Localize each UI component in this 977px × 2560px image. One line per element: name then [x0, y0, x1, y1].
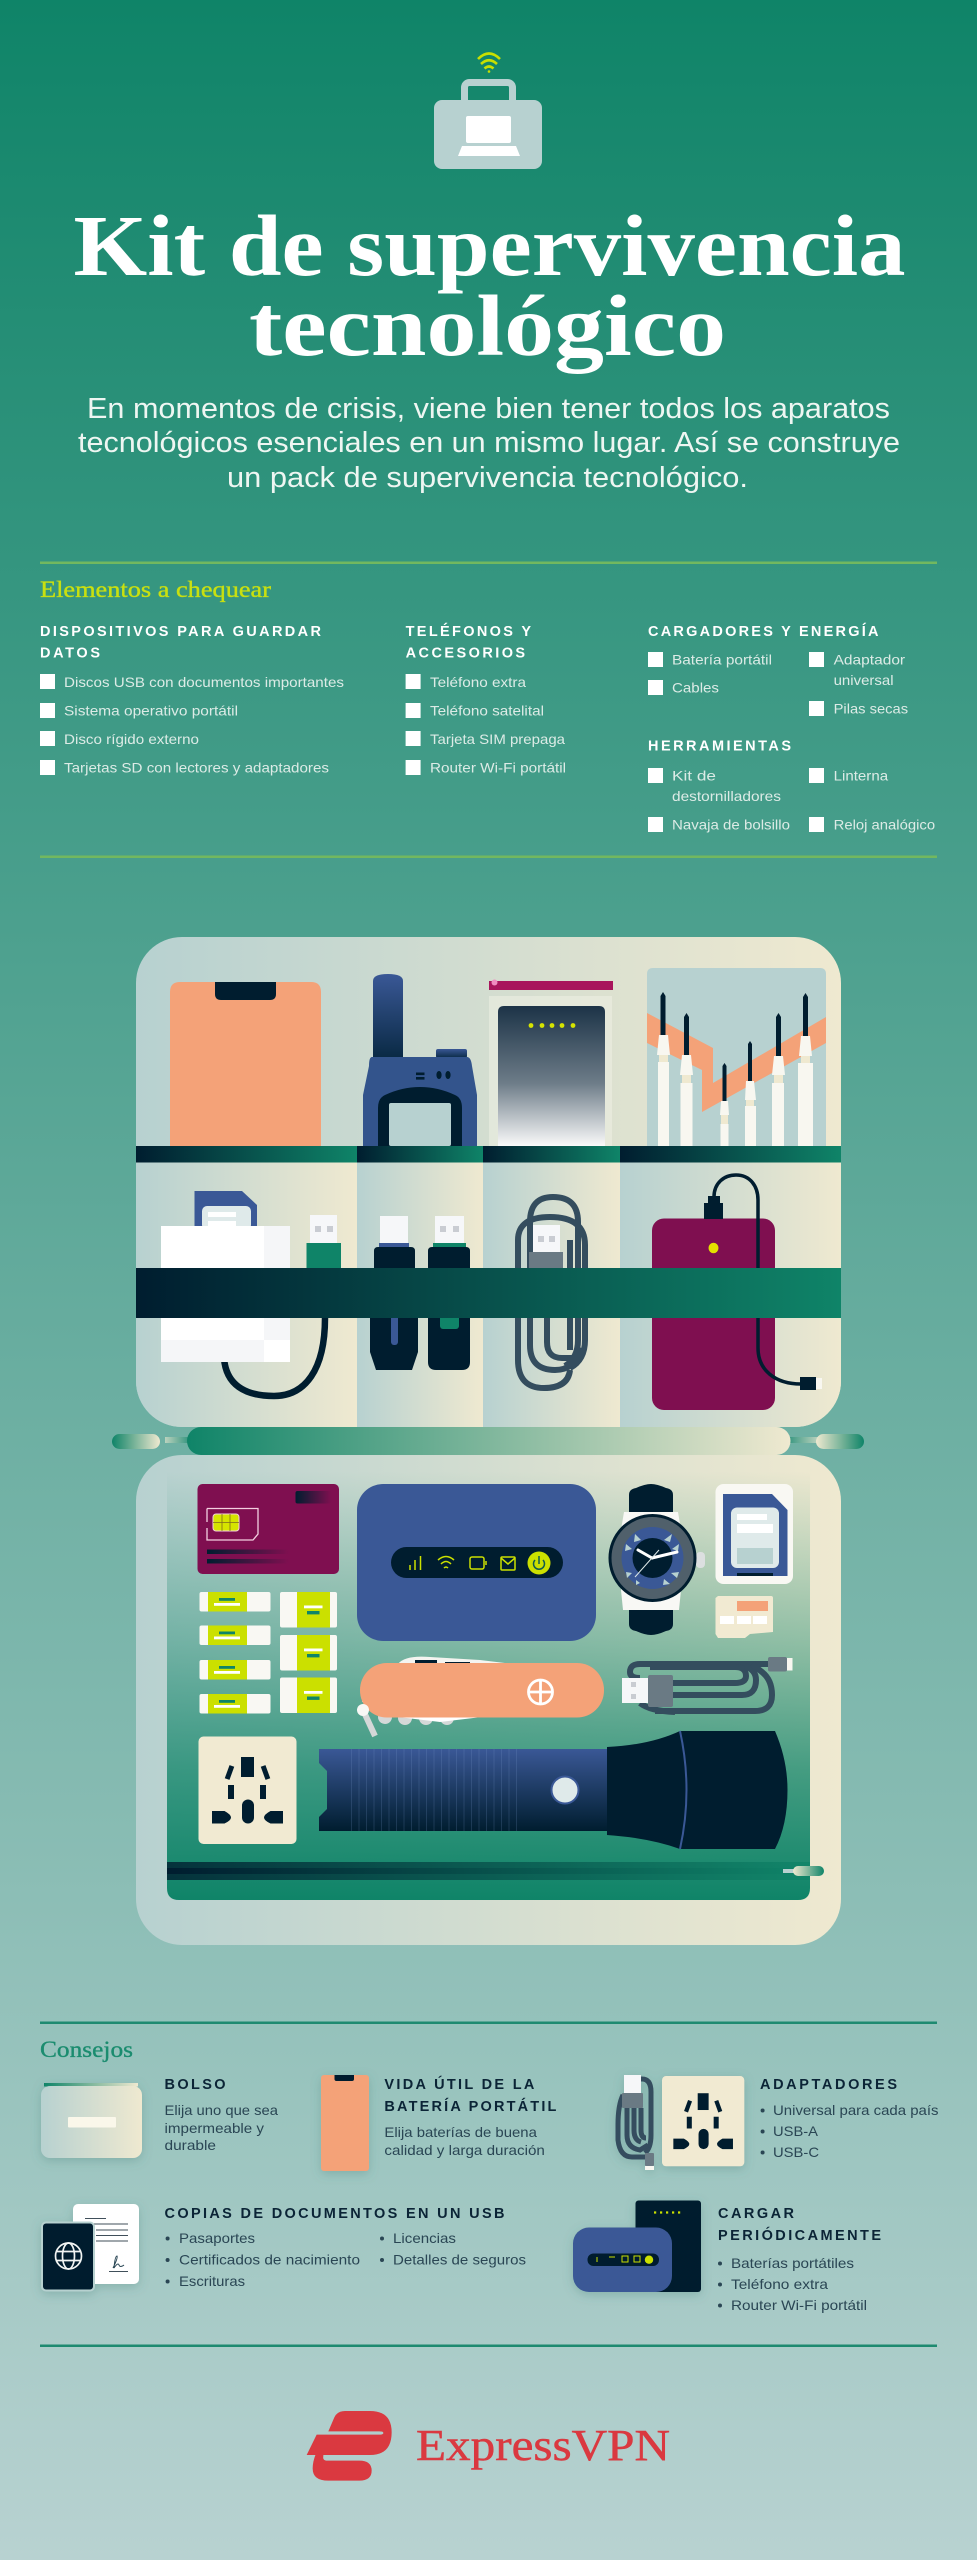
logo: ExpressVPN: ExpressVPN: [416, 2421, 670, 2470]
icon: logo mark: [307, 2411, 392, 2481]
column: herramientas: Navaja de bolsillo: [672, 816, 790, 832]
tip: adaptadores: USB-A: [773, 2123, 819, 2139]
icon: analog watch: [610, 1484, 705, 1635]
column: herramientas: Reloj analógico: [834, 816, 935, 832]
column: herramientas: HERRAMIENTAS: [648, 738, 791, 754]
column: teléfonos: TELÉFONOS Y: [406, 623, 531, 640]
column: dispositivos: Discos USB con documentos importantes: [64, 674, 344, 690]
icon: portable wifi router: [357, 1484, 596, 1641]
icon: extra phone: [170, 982, 321, 1146]
column: cargadores: Cables: [672, 680, 719, 696]
column: teléfonos: Tarjeta SIM prepaga: [430, 731, 565, 747]
panel: open case, bottom half: [136, 1455, 841, 1945]
icon: batteries: [200, 1592, 337, 1714]
tip: bolso: BOLSO: [164, 2077, 226, 2093]
column: herramientas: Kit de: [672, 768, 716, 784]
tip: bolso: [41, 2077, 278, 2158]
tip: copias de documentos: Licencias: [393, 2230, 456, 2246]
case zipper hinge: [112, 1427, 864, 1455]
tip: cargar periódicamente: Teléfono extra: [731, 2276, 828, 2292]
lower compartments: [136, 1162, 841, 1428]
tip: bolso: Elija uno que sea: [164, 2102, 278, 2118]
tip: vida útil de la batería portátil: Elija baterías de buena: [384, 2124, 537, 2140]
column: dispositivos: DATOS: [40, 646, 100, 662]
icon: USB cable loops: [622, 1657, 792, 1712]
icon: pocket knife: [357, 1657, 604, 1736]
zipper: [167, 1862, 824, 1880]
panel: open case, top half: [136, 937, 841, 1428]
icon: bag: [41, 2083, 142, 2158]
tip: cargar periódicamente: CARGAR: [718, 2206, 795, 2222]
icon: documents and passport: [42, 2204, 139, 2290]
column: cargadores: [648, 623, 908, 716]
tip: adaptadores: Universal para cada país: [773, 2102, 938, 2118]
column: herramientas: [648, 738, 935, 832]
tip: cargar periódicamente: Router Wi-Fi portátil: [731, 2297, 867, 2313]
column: teléfonos: Teléfono satelital: [430, 702, 544, 718]
tip: cargar periódicamente: [573, 2200, 881, 2313]
tip: vida útil de la batería portátil: BATERÍA PORTÁTIL: [384, 2098, 557, 2115]
title: [74, 197, 906, 374]
tip: adaptadores: USB-C: [773, 2144, 819, 2160]
heading: elementos a chequear: Elementos a chequear: [40, 577, 271, 602]
panel: checklist: [40, 577, 935, 832]
icon: SD card: [716, 1484, 793, 1584]
column: herramientas: Linterna: [834, 768, 888, 784]
tip: cargar periódicamente: PERIÓDICAMENTE: [718, 2226, 881, 2244]
column: cargadores: Adaptador: [834, 652, 905, 668]
band across compartments: [136, 1268, 841, 1318]
tip: copias de documentos: [42, 2204, 526, 2290]
title: tecnológico: [249, 277, 726, 374]
column: dispositivos: Tarjetas SD con lectores y adaptadores: [64, 760, 329, 776]
tip: copias de documentos: Certificados de nacimiento: [179, 2252, 360, 2268]
tip: copias de documentos: Pasaportes: [179, 2230, 255, 2246]
tip: cargar periódicamente: Baterías portátiles: [731, 2255, 854, 2271]
case shell: [136, 1455, 841, 1945]
intro text: un pack de supervivencia tecnológico.: [227, 462, 748, 494]
icon: laptop bag with wifi: [434, 54, 542, 169]
column: dispositivos: Disco rígido externo: [64, 731, 199, 747]
icon: power bank: [652, 1175, 822, 1410]
icon: universal adapter: [198, 1736, 296, 1844]
column: teléfonos: Router Wi-Fi portátil: [430, 760, 566, 776]
column: cargadores: universal: [834, 672, 894, 688]
tip: bolso: impermeable y: [164, 2120, 264, 2136]
column: cargadores: Batería portátil: [672, 652, 772, 668]
icon: SIM card: [198, 1484, 339, 1574]
tip: copias de documentos: Detalles de seguros: [393, 2252, 526, 2268]
case shell: [136, 937, 841, 1427]
tip: bolso: durable: [164, 2137, 216, 2153]
column: dispositivos: [40, 624, 344, 776]
intro text: [78, 393, 900, 494]
inner lining: [167, 1471, 810, 1900]
heading: consejos: Consejos: [40, 2037, 133, 2062]
icon: mobile hotspot device: [489, 980, 613, 1146]
tip: copias de documentos: Escrituras: [179, 2273, 245, 2289]
icon: external drive with SD card and USB: [161, 1191, 341, 1396]
column: teléfonos: ACCESORIOS: [406, 646, 525, 662]
icon: flashlight: [319, 1731, 788, 1849]
tip: vida útil de la batería portátil: VIDA ÚTIL DE LA: [384, 2075, 535, 2093]
column: dispositivos: DISPOSITIVOS PARA GUARDAR: [40, 624, 322, 640]
tip: copias de documentos: COPIAS DE DOCUMENTOS EN UN USB: [164, 2206, 504, 2222]
icon: wifi router with antennas: [647, 968, 826, 1146]
tip: vida útil de la batería portátil: calidad y larga duración: [384, 2142, 545, 2158]
column: teléfonos: [406, 623, 566, 776]
icon: coiled USB cable: [518, 1197, 585, 1388]
tip: adaptadores: ADAPTADORES: [760, 2077, 897, 2093]
column: cargadores: Pilas secas: [834, 700, 908, 716]
title: Kit de supervivencia: [74, 197, 906, 294]
intro text: tecnológicos esenciales en un mismo lugar. Así se construye: [78, 427, 900, 459]
icon: phone: [321, 2075, 369, 2171]
logo: ExpressVPN: [307, 2411, 670, 2481]
tip: vida útil de la batería portátil: [321, 2075, 557, 2171]
panel: tips: [40, 2037, 938, 2313]
intro text: En momentos de crisis, viene bien tener todos los aparatos: [87, 393, 890, 425]
column: teléfonos: Teléfono extra: [430, 674, 526, 690]
column: cargadores: CARGADORES Y ENERGÍA: [648, 623, 879, 640]
tip: adaptadores: [618, 2075, 938, 2170]
icon: cable and adapter: [618, 2075, 744, 2170]
icon: micro SD card: [716, 1596, 773, 1638]
icon: satellite phone: [363, 974, 477, 1146]
column: herramientas: destornilladores: [672, 788, 781, 804]
shelf strip: [136, 1146, 841, 1162]
icon: USB sticks: [370, 1216, 470, 1370]
icon: hotspot and router: [573, 2200, 701, 2292]
column: dispositivos: Sistema operativo portátil: [64, 702, 238, 718]
